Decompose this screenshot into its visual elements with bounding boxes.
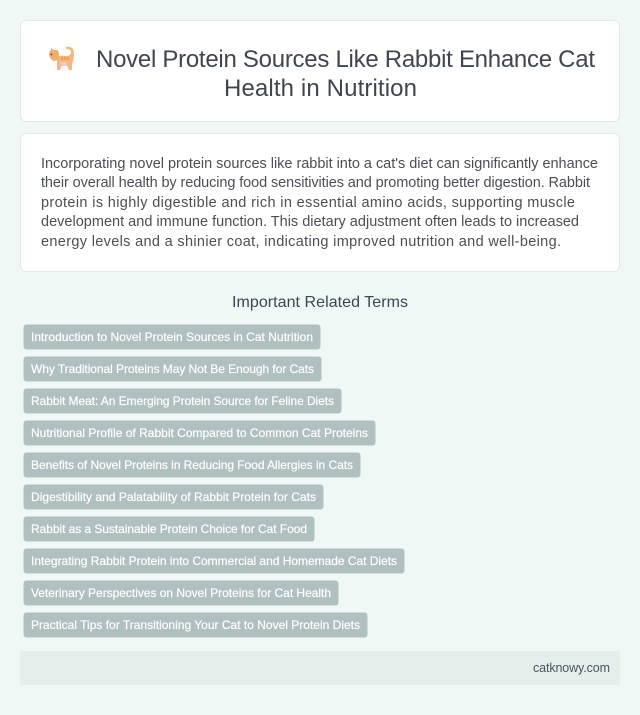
- description text: [41, 156, 598, 250]
- tag 6: [24, 484, 324, 510]
- tag 1: [24, 324, 320, 350]
- tag 9: Veterinary Perspectives on Novel Proteins for Cat Health: [31, 586, 331, 600]
- panel: description: [20, 134, 620, 272]
- footer source text: catknowy.com: [533, 661, 610, 675]
- tag 1: Introduction to Novel Protein Sources in Cat Nutrition: [31, 330, 313, 344]
- tag 2: [24, 356, 322, 382]
- tag 9: [24, 580, 338, 606]
- description text: their overall health by reducing food sensitivities and promoting better digestion. Rabbit: [41, 175, 590, 191]
- tag 6: Digestibility and Palatability of Rabbit Protein for Cats: [31, 490, 316, 504]
- description text: development and immune function. This dietary adjustment often leads to increased: [41, 214, 579, 230]
- tag 8: Integrating Rabbit Protein into Commercial and Homemade Cat Diets: [31, 554, 397, 568]
- title text: Novel Protein Sources Like Rabbit Enhance Cat: [96, 46, 595, 73]
- title text: [96, 46, 595, 102]
- title text: Health in Nutrition: [224, 75, 417, 102]
- tag 10: Practical Tips for Transitioning Your Cat to Novel Protein Diets: [31, 618, 360, 632]
- panel: title card: [20, 20, 620, 122]
- icon: cat: [49, 47, 74, 70]
- tag 7: Rabbit as a Sustainable Protein Choice for Cat Food: [31, 522, 307, 536]
- tag 3: [24, 388, 342, 414]
- tag 3: Rabbit Meat: An Emerging Protein Source for Feline Diets: [31, 394, 334, 408]
- heading: important related terms: Important Related Terms: [232, 294, 408, 311]
- tag 2: Why Traditional Proteins May Not Be Enough for Cats: [31, 362, 314, 376]
- tag 7: [24, 516, 314, 542]
- tag 10: [24, 612, 368, 638]
- tag 5: [24, 452, 360, 478]
- list: related term tags: [24, 324, 404, 638]
- tag 4: [24, 420, 376, 446]
- description text: protein is highly digestible and rich in essential amino acids, supporting muscle: [41, 195, 575, 211]
- description text: Incorporating novel protein sources like rabbit into a cat's diet can significantly enhance: [41, 156, 598, 172]
- description text: energy levels and a shinier coat, indicating improved nutrition and well-being.: [41, 234, 561, 250]
- tag 8: [24, 548, 404, 574]
- tag 5: Benefits of Novel Proteins in Reducing Food Allergies in Cats: [31, 458, 353, 472]
- tag 4: Nutritional Profile of Rabbit Compared to Common Cat Proteins: [31, 426, 368, 440]
- footer bar: [20, 651, 620, 685]
